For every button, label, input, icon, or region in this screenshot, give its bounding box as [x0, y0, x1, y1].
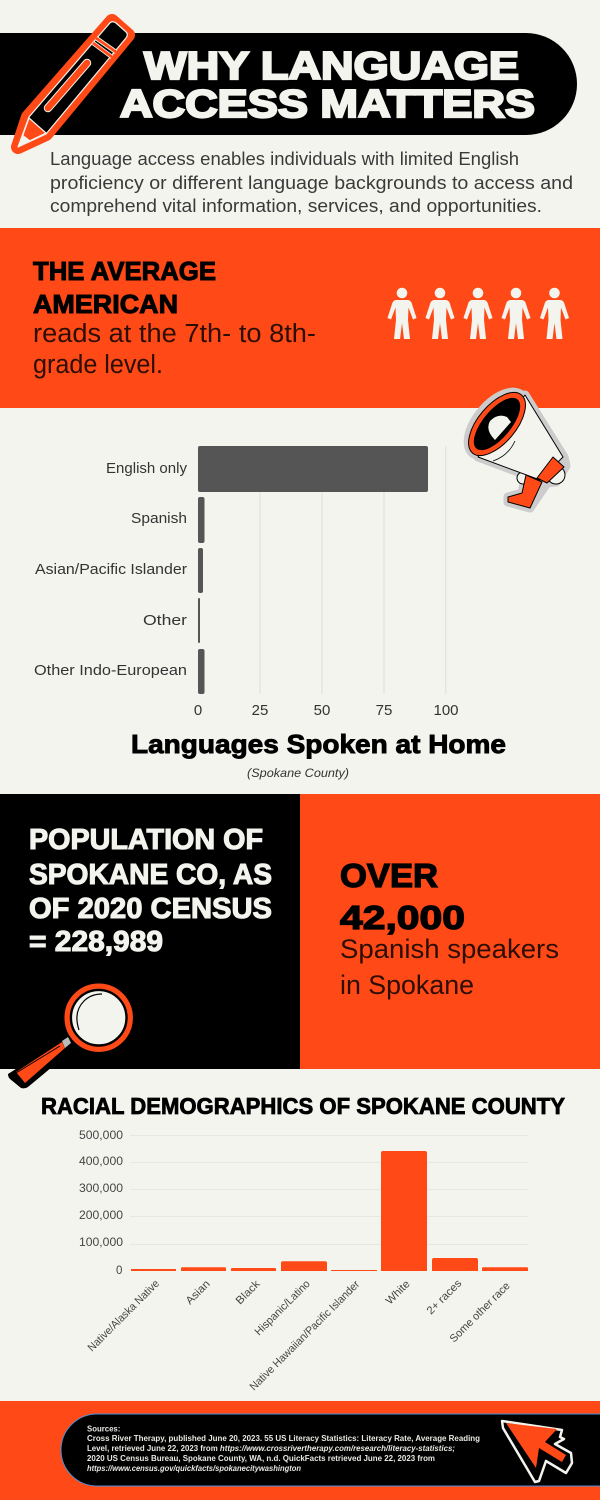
- bar chart: languages spoken at home: Asian/Pacific Islander: [35, 561, 187, 578]
- panel: footer: [0, 1401, 600, 1500]
- average American heading: AMERICAN: [33, 289, 178, 319]
- reading level text: reads at the 7th- to 8th-: [33, 320, 316, 348]
- sources text: Level, retrieved June 22, 2023 from https://www.crossrivertherapy.com/research/literacy-statistics;: [87, 1444, 455, 1453]
- bar chart: racial demographics: Native Hawaiian/Pacific Islander: [248, 1278, 362, 1393]
- title: WHY LANGUAGE: [144, 45, 519, 88]
- reading level text: [33, 320, 316, 379]
- population text: POPULATION OF: [29, 824, 263, 856]
- sources pill: [61, 1414, 600, 1486]
- bar chart: racial demographics: 500,000: [79, 1130, 123, 1142]
- population text: = 228,989: [29, 926, 163, 958]
- bar chart: languages spoken at home: Other Indo-European: [34, 662, 187, 679]
- bar chart: racial demographics: Some other race: [448, 1280, 513, 1345]
- bar chart: languages spoken at home: [34, 446, 459, 719]
- bar chart: racial demographics: 300,000: [79, 1183, 123, 1195]
- reading level text: grade level.: [33, 351, 163, 379]
- bar chart: racial demographics: Asian: [184, 1278, 213, 1307]
- average American heading: [33, 256, 216, 319]
- sources text: [87, 1424, 480, 1473]
- bar chart: racial demographics: White: [384, 1278, 413, 1307]
- bar chart: racial demographics: Native/Alaska Native: [86, 1278, 162, 1354]
- bar chart: racial demographics: 0: [116, 1265, 122, 1277]
- icon: five people: [388, 288, 569, 339]
- title: ACCESS MATTERS: [120, 83, 535, 126]
- bar chart: languages spoken at home: 50: [314, 702, 330, 719]
- bar chart: racial demographics: Black: [234, 1278, 263, 1307]
- bar chart: racial demographics: 2+ races: [425, 1277, 465, 1317]
- icon: megaphone: [457, 382, 566, 508]
- population text: [29, 824, 272, 958]
- intro paragraph: proficiency or different language backgrounds to access and: [50, 172, 573, 193]
- header banner: [0, 33, 577, 135]
- bar chart: languages spoken at home: Other: [143, 612, 187, 629]
- bar chart: languages spoken at home: 100: [433, 702, 459, 719]
- title: [120, 45, 535, 126]
- average American heading: THE AVERAGE: [33, 256, 216, 286]
- bar chart: racial demographics: 200,000: [79, 1210, 123, 1222]
- Spanish speakers text: [340, 934, 559, 1000]
- bar chart: languages spoken at home: English only: [106, 460, 187, 477]
- panel: average American: [0, 228, 600, 408]
- population text: SPOKANE CO, AS: [29, 859, 272, 891]
- chart subtitle: (Spokane County): [247, 766, 349, 780]
- bar chart: languages spoken at home: 0: [194, 702, 202, 719]
- panel: population: [0, 794, 300, 1069]
- bar chart: languages spoken at home: 75: [376, 702, 392, 719]
- bar chart: racial demographics: 100,000: [79, 1237, 123, 1249]
- bar chart: racial demographics: 400,000: [79, 1156, 123, 1168]
- intro paragraph: comprehend vital information, services, and opportunities.: [50, 195, 542, 216]
- sources text: Sources:: [87, 1424, 120, 1434]
- population text: OF 2020 CENSUS: [29, 893, 272, 925]
- chart title: Languages Spoken at Home: [131, 729, 506, 759]
- bar chart: racial demographics: [79, 1130, 528, 1393]
- sources text: 2020 US Census Bureau, Spokane County, WA, n.d. QuickFacts retrieved June 22, 2023 from: [87, 1454, 435, 1463]
- Spanish speakers number: OVER: [340, 857, 438, 894]
- icon: cursor arrow: [502, 1421, 572, 1482]
- icon: pencil: [18, 21, 128, 147]
- racial demographics heading: RACIAL DEMOGRAPHICS OF SPOKANE COUNTY: [41, 1093, 565, 1119]
- sources text: https://www.census.gov/quickfacts/spokanecitywashington: [87, 1464, 301, 1473]
- panel: Spanish speakers: [300, 794, 600, 1069]
- bar chart: racial demographics: Hispanic/Latino: [253, 1278, 313, 1338]
- bar chart: languages spoken at home: 25: [252, 702, 268, 719]
- intro paragraph: Language access enables individuals with limited English: [50, 148, 519, 169]
- sources text: Cross River Therapy, published June 20, 2023. 55 US Literacy Statistics: Literacy Rate, Average Reading: [87, 1434, 480, 1443]
- icon: magnifying glass: [8, 986, 130, 1088]
- Spanish speakers number: [340, 857, 465, 936]
- Spanish speakers text: in Spokane: [340, 970, 474, 1000]
- Spanish speakers number: 42,000: [340, 899, 465, 936]
- bar chart: languages spoken at home: Spanish: [131, 510, 187, 527]
- Spanish speakers text: Spanish speakers: [340, 934, 559, 964]
- intro paragraph: [50, 148, 573, 216]
